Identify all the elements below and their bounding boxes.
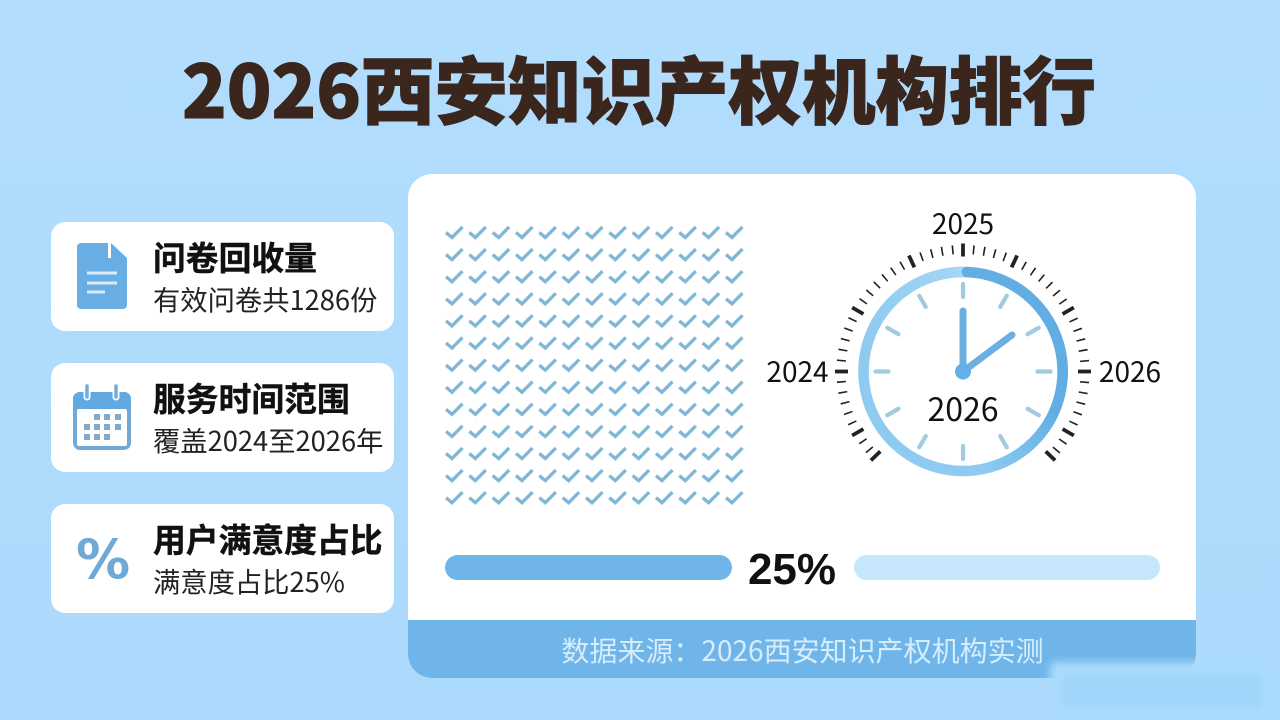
text: satisfaction share: 满意度占比25% <box>153 560 345 600</box>
year labels: 2025 <box>932 203 994 243</box>
icon: calendar <box>73 386 131 450</box>
clock hands <box>963 311 1012 372</box>
footer band <box>408 620 1196 678</box>
icon: percent: % <box>76 528 130 591</box>
heading: satisfaction: 用户满意度占比 <box>153 515 383 562</box>
chart: clock dial: 2024 <box>766 351 829 391</box>
panel: main <box>408 174 1196 678</box>
heading: service period: 服务时间范围 <box>153 374 350 421</box>
text: service years: 覆盖2024至2026年 <box>153 419 383 459</box>
watermark smudge <box>1050 662 1276 716</box>
dial major ticks <box>835 244 1091 460</box>
panel: service period card <box>51 363 394 472</box>
dial minor ticks <box>841 250 1085 494</box>
clock ring <box>864 272 1062 471</box>
text: data source: 数据来源：2026西安知识产权机构实测 <box>561 630 1044 670</box>
chart: clock dial: 2026 <box>927 385 999 431</box>
chart: grid of check marks <box>442 221 746 508</box>
heading: questionnaire: 问卷回收量 <box>153 233 317 280</box>
progress arc <box>967 272 1063 468</box>
chart: clock dial <box>766 203 1161 520</box>
title: 2026西安知识产权机构排行 <box>182 34 1096 140</box>
panel: questionnaire card <box>51 222 394 331</box>
progress value: 25% <box>748 545 836 594</box>
text: questionnaire count: 有效问卷共1286份 <box>153 278 377 318</box>
icon: document <box>77 243 127 309</box>
chart: progress bar <box>445 545 1160 594</box>
hour marks <box>876 284 1050 459</box>
chart: clock dial: 2026 <box>1099 351 1161 391</box>
panel: satisfaction card <box>51 504 394 613</box>
